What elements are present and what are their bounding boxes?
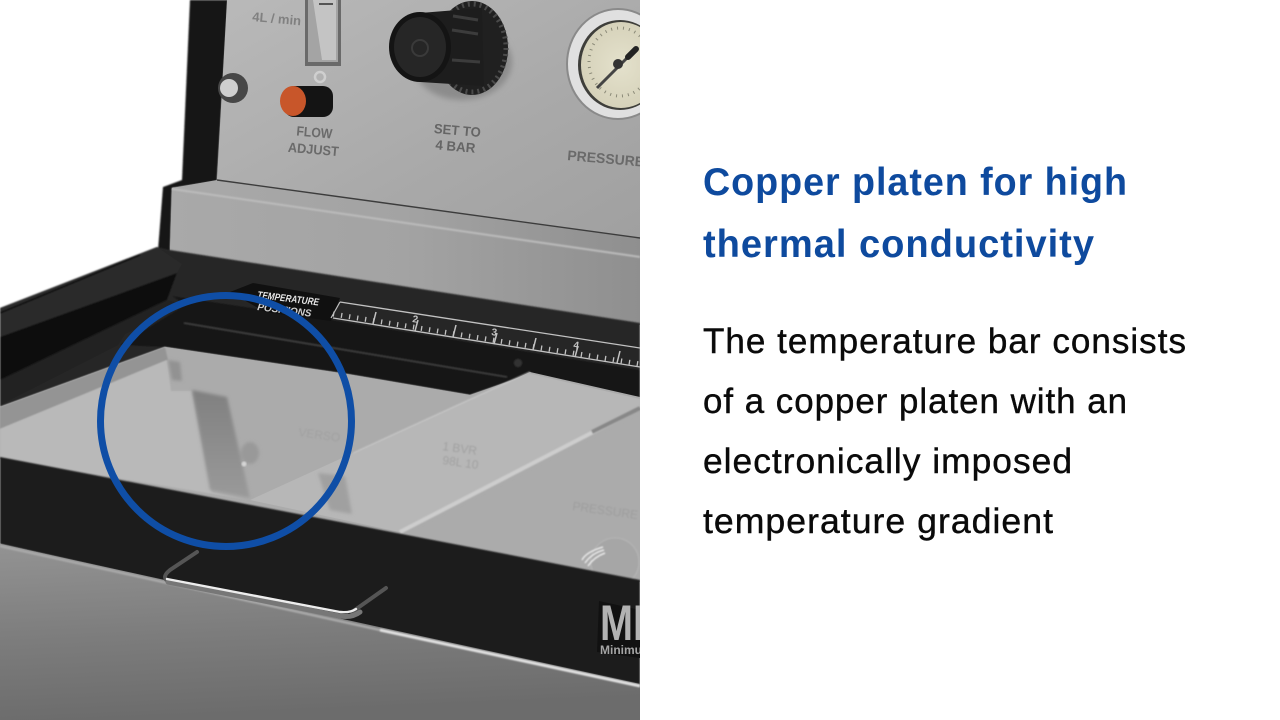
flowmeter window — [305, 0, 341, 66]
body text — [703, 322, 1187, 541]
temperature label: TEMPERATURE — [257, 290, 320, 309]
pressure text: PRESSURE — [567, 147, 645, 170]
lower glass plate — [412, 415, 640, 582]
chrome handle — [165, 552, 386, 616]
shaded reflections on platen — [168, 360, 259, 498]
heading: Copper platen for high — [703, 161, 1128, 204]
drawer highlight — [0, 546, 640, 686]
pressure gauge — [566, 8, 640, 120]
highlight circle — [100, 296, 352, 546]
heading — [703, 161, 1128, 266]
temperature label — [230, 283, 340, 321]
orange flow knob — [280, 72, 333, 117]
ledge edge lines — [172, 180, 640, 257]
temperature ruler: 3 — [491, 327, 498, 339]
black front rail — [0, 457, 640, 690]
body text: The temperature bar consists — [703, 322, 1187, 361]
stainless drawer front — [0, 544, 640, 720]
faint reversed text on glass: 1 BVR — [442, 439, 478, 458]
set to text — [434, 124, 480, 153]
faint reversed text on glass — [443, 442, 478, 469]
temperature ruler: 4 — [573, 340, 580, 352]
faint reversed label: PRESSURE — [572, 499, 639, 522]
stainless front panel — [217, 0, 640, 238]
grey ledge — [170, 180, 640, 325]
darker platen edge strip — [0, 347, 168, 429]
round fitting — [581, 546, 606, 567]
black tray body — [0, 247, 640, 407]
flow adjust text — [288, 126, 339, 156]
heading: thermal conductivity — [703, 223, 1095, 266]
body text: temperature gradient — [703, 502, 1054, 541]
body text: of a copper platen with an — [703, 382, 1128, 421]
temperature ruler: 2 — [412, 314, 419, 326]
slide shadow — [318, 473, 352, 514]
flow label: 4L / min — [252, 9, 302, 28]
small metal button — [218, 73, 248, 103]
temperature label: POSITIONS — [257, 302, 312, 320]
instrument photo — [0, 0, 669, 720]
slide edge — [353, 372, 640, 532]
temperature ruler — [331, 302, 640, 367]
MI logo: Minimu — [600, 643, 642, 657]
pressure regulator knob — [389, 1, 512, 100]
faint reversed text on glass: 98L 10 — [442, 453, 480, 472]
set to text: 4 BAR — [435, 137, 476, 156]
glass slide — [250, 372, 640, 532]
flow adjust text: ADJUST — [287, 140, 340, 159]
light glass plate — [0, 360, 220, 494]
platen screw highlight — [242, 462, 246, 466]
MI logo — [597, 601, 640, 658]
flow adjust text: FLOW — [296, 123, 333, 142]
body text: electronically imposed — [703, 442, 1073, 481]
set to text: SET TO — [433, 121, 481, 140]
faint reversed text on glass: VERSO — [298, 425, 341, 445]
glass platen — [0, 347, 640, 548]
MI logo: MI — [600, 595, 644, 651]
black housing frame — [158, 0, 228, 252]
